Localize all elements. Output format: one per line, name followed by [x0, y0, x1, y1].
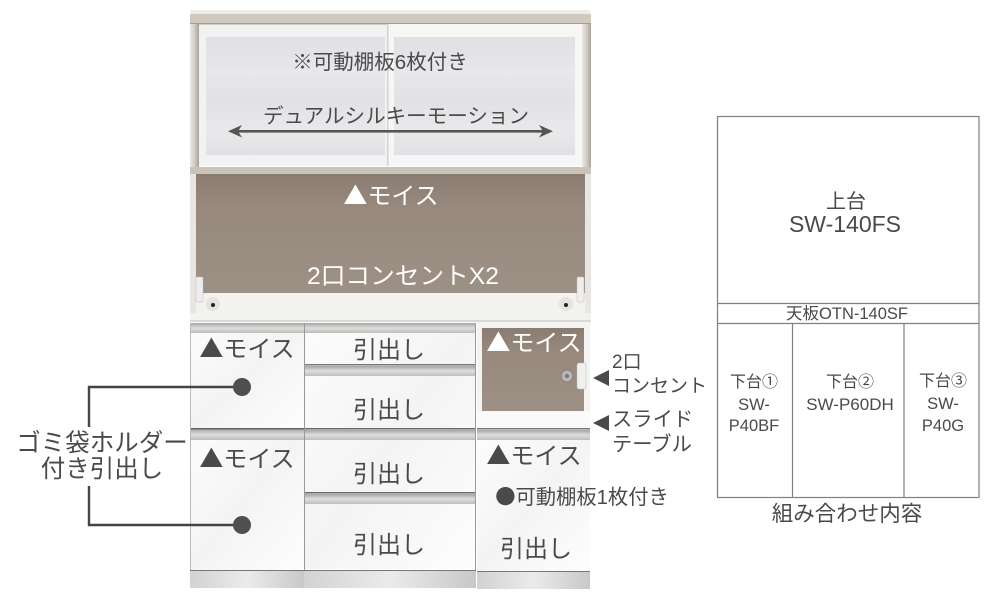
- label: base unit 2: 下台②: [826, 368, 874, 392]
- combination diagram: [718, 116, 979, 498]
- label: base unit 3: [919, 367, 967, 435]
- text: dual silky motion: デュアルシルキーモーション: [263, 105, 529, 128]
- text: moisu left top: ▲モイス: [199, 329, 295, 364]
- label: base unit 3: SW-: [927, 395, 959, 413]
- arrow: sliding double-headed: [228, 125, 553, 138]
- label: base unit 1: SW-: [738, 396, 770, 414]
- label: base unit 1: [729, 368, 779, 435]
- open niche panel: [190, 174, 591, 322]
- cabinet illustration: [190, 10, 591, 589]
- text: moisu left bottom: ▲モイス: [199, 439, 295, 474]
- label: base unit 3: 下台③: [919, 367, 967, 391]
- callout: slide table: スライド: [612, 409, 693, 431]
- lower cabinet left column: [190, 323, 304, 588]
- icon: socket in counter niche: [561, 363, 586, 389]
- icon: outlet right: [559, 277, 584, 311]
- upper cabinet frame: [190, 10, 591, 314]
- text: drawer 1: 引出し: [353, 337, 425, 364]
- label: base unit 3: P40G: [922, 417, 964, 435]
- text: drawer 3: 引出し: [353, 461, 425, 488]
- callout: slide table: [593, 409, 693, 456]
- caption: combination contents: 組み合わせ内容: [772, 502, 922, 526]
- callout: slide table: テーブル: [612, 432, 692, 456]
- text: drawer 2: 引出し: [353, 397, 425, 424]
- callout: trash bag holder with connector: ゴミ袋ホルダー: [16, 429, 188, 457]
- label: upper unit: 上台: [826, 190, 866, 213]
- callout: trash bag holder with connector: [16, 378, 251, 534]
- callout: two outlets: コンセント: [612, 376, 707, 397]
- text: 2 outlets x2: 2口コンセントX2: [307, 263, 499, 290]
- text: moisu right: ▲モイス: [486, 436, 582, 471]
- callout: trash bag holder with connector: 付き引出し: [41, 455, 163, 483]
- label: base unit 2: SW-P60DH: [806, 395, 894, 414]
- label: upper unit: SW-140FS: [789, 211, 901, 237]
- label: upper unit: [789, 190, 901, 237]
- sliding glass doors: [199, 24, 582, 166]
- callout: two outlets: 2口: [612, 352, 642, 373]
- label: base unit 1: P40BF: [729, 417, 779, 435]
- lower cabinet middle column: [304, 323, 476, 588]
- icon: outlet left: [196, 277, 220, 311]
- text: drawer 5: 引出し: [500, 536, 572, 563]
- text: drawer 4: 引出し: [353, 532, 425, 559]
- text: moisu counter niche: ▲モイス: [486, 323, 582, 358]
- label: top board: 天板OTN-140SF: [786, 304, 908, 323]
- label: base unit 1: 下台①: [730, 368, 778, 392]
- label: base unit 2: [806, 368, 894, 414]
- lower cabinet right column: [477, 322, 590, 589]
- text: movable shelf one: ●可動棚板1枚付き: [495, 480, 669, 510]
- callout: two outlets: [593, 352, 707, 397]
- text: movable shelves: ※可動棚板6枚付き: [292, 51, 468, 74]
- text: moisu upper: ▲モイス: [343, 176, 439, 211]
